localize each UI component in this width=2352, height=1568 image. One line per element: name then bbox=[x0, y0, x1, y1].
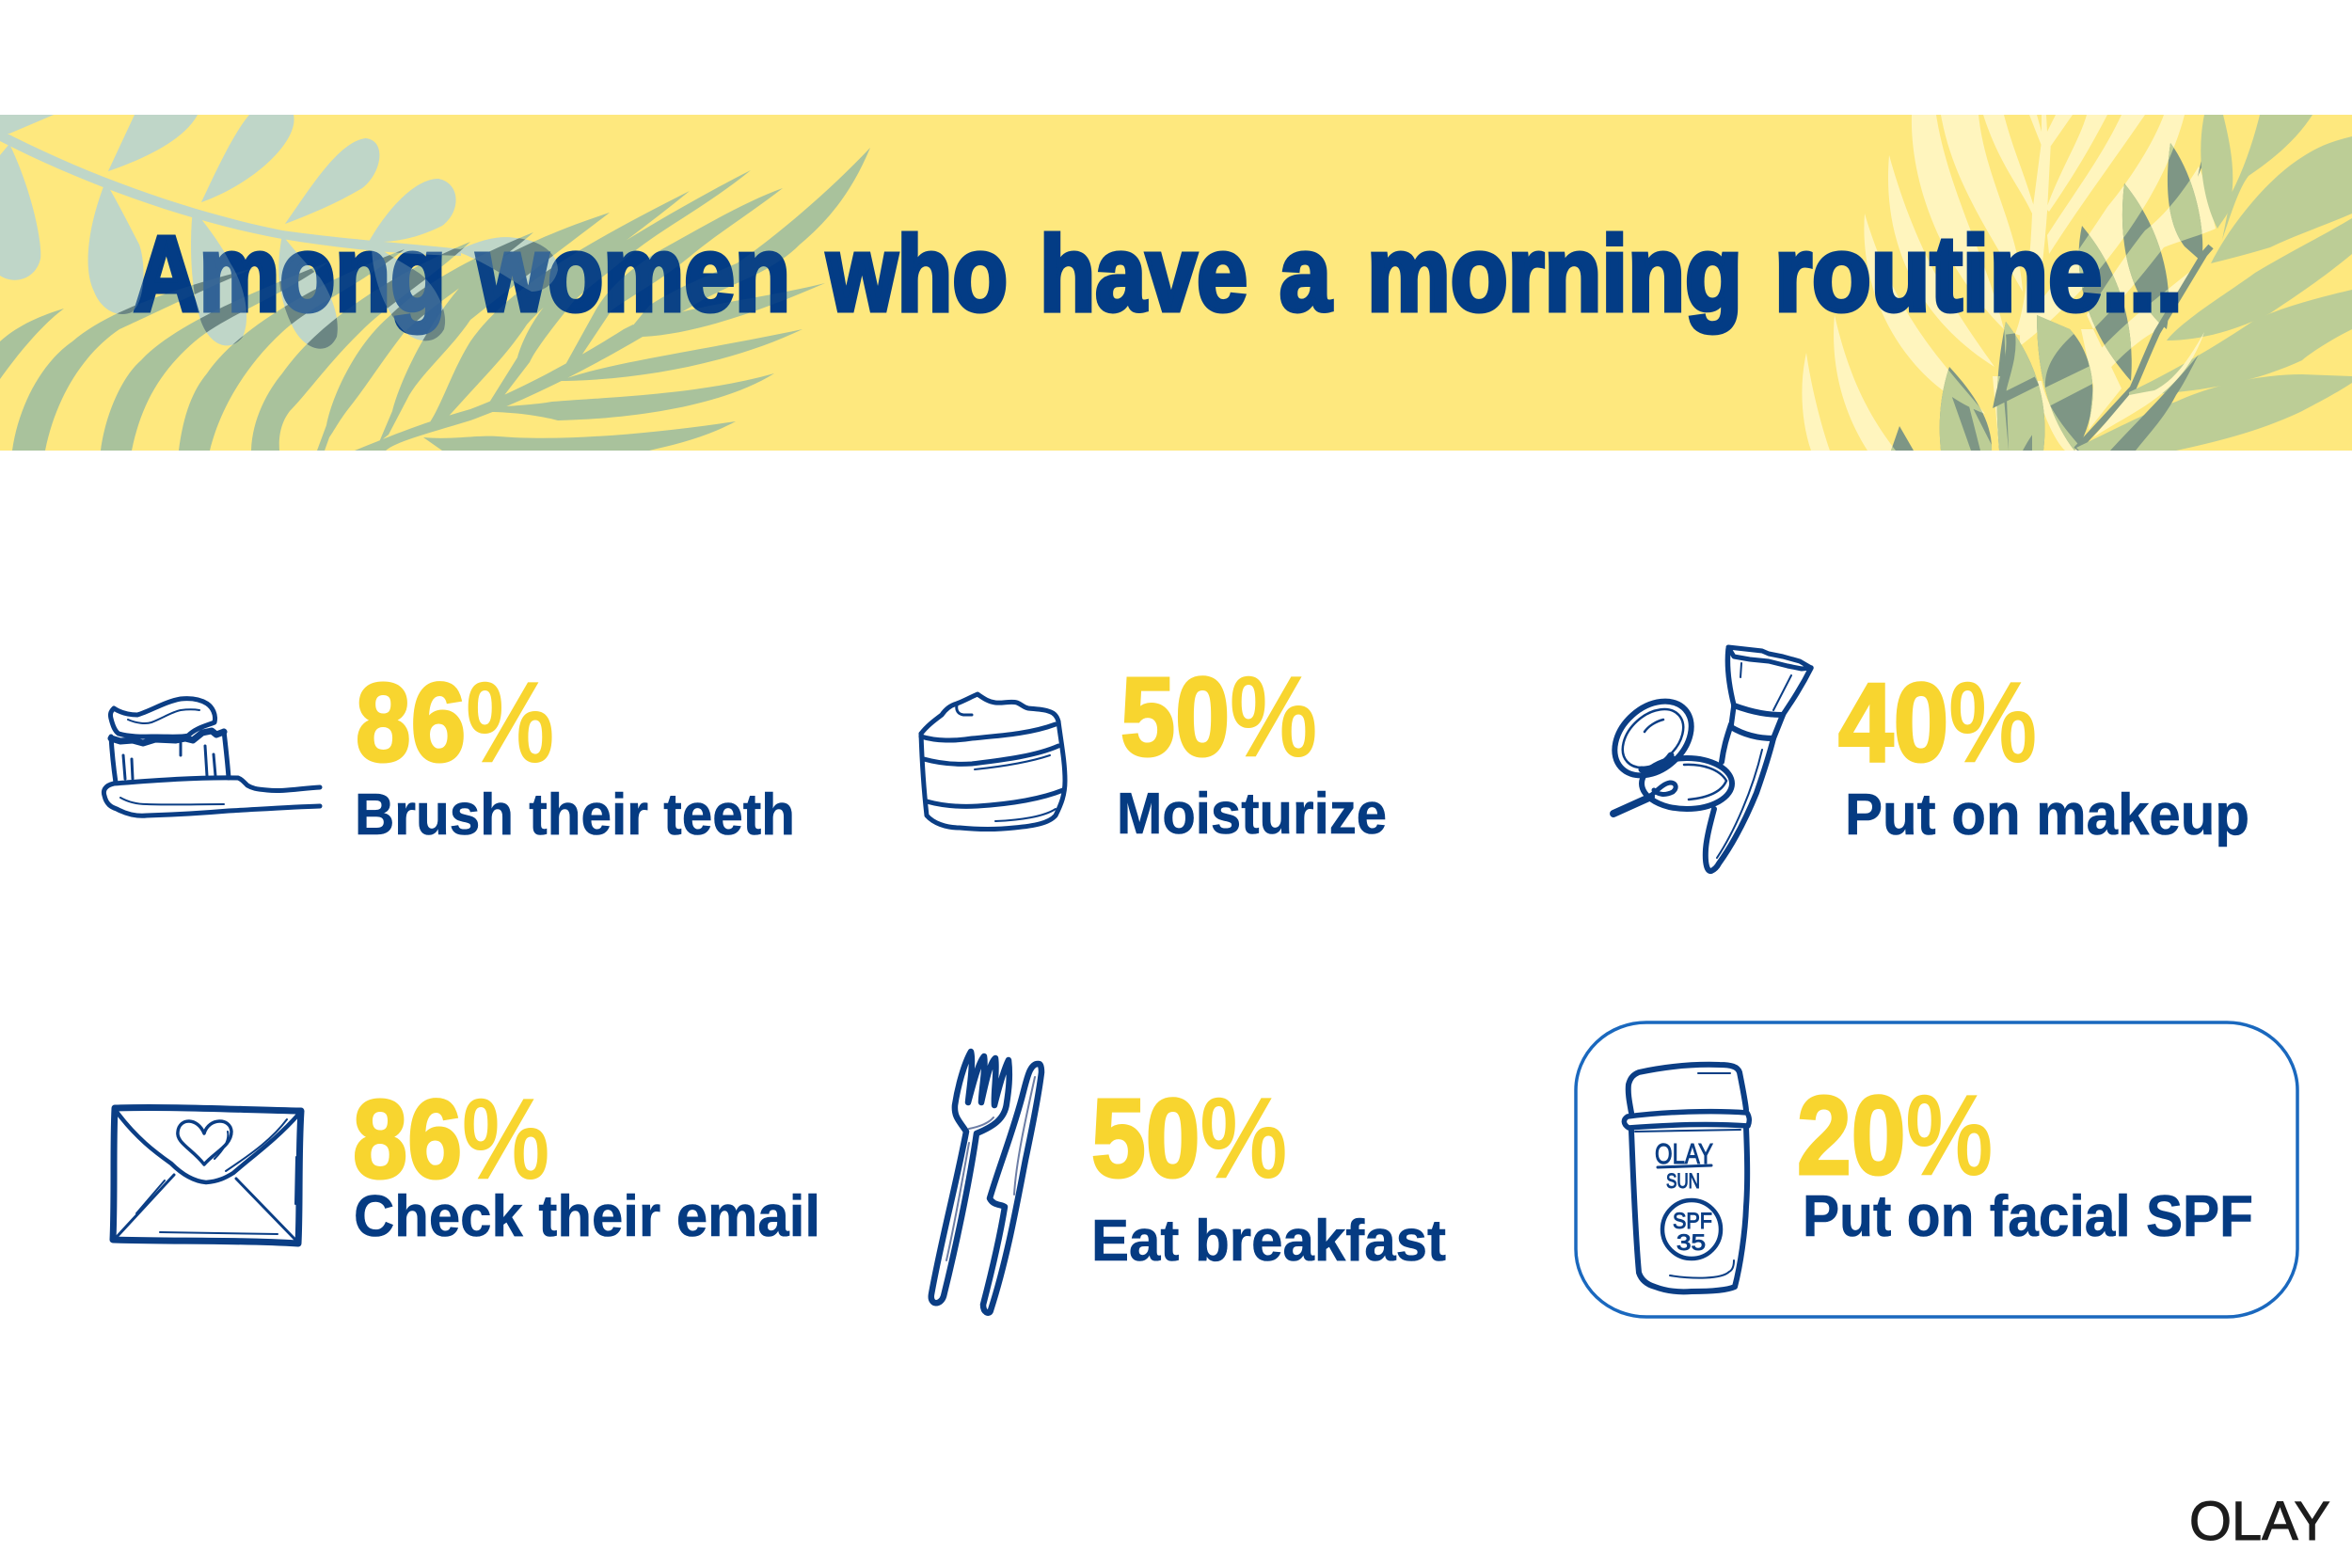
title: routine... bbox=[1774, 214, 2183, 333]
bottle label text bbox=[1655, 1137, 1713, 1256]
title: women bbox=[476, 214, 790, 333]
percentage: 50% bbox=[1120, 655, 1317, 780]
bottle label text: 35 bbox=[1677, 1230, 1706, 1256]
percentage: 86% bbox=[353, 1077, 549, 1202]
percentage: 20% bbox=[1797, 1073, 1993, 1198]
cream strip over big leaves bbox=[2093, 332, 2204, 437]
icon: toothbrush bbox=[103, 699, 320, 816]
banner bbox=[0, 115, 2352, 451]
label: Check their email bbox=[354, 1184, 820, 1249]
cream palm right bbox=[1802, 115, 2216, 451]
label: Moisturize bbox=[1117, 782, 1387, 847]
stat: moisturize bbox=[921, 655, 1387, 847]
title: have bbox=[1040, 214, 1248, 333]
stat: makeup bbox=[1600, 647, 2249, 871]
icon: fork and knife bbox=[931, 1052, 1041, 1313]
palm leaf left bbox=[0, 148, 870, 451]
stat: breakfast bbox=[931, 1052, 1446, 1313]
dark band across big leaves bbox=[2110, 355, 2199, 451]
narrow leaves right bbox=[1891, 143, 2211, 451]
stat: email bbox=[113, 1077, 820, 1249]
title bbox=[133, 231, 2179, 335]
icon: makeup brush and compact bbox=[1600, 647, 1811, 871]
percentage: 50% bbox=[1091, 1076, 1287, 1201]
icon: envelope with heart bbox=[113, 1107, 301, 1243]
bottle label text: SUN bbox=[1666, 1169, 1700, 1193]
title: Among bbox=[134, 214, 446, 333]
highlighted stat: facial SPF bbox=[1576, 1022, 2297, 1317]
bottle label text: OLAY bbox=[1655, 1137, 1713, 1170]
label: Put on makeup bbox=[1845, 783, 2249, 847]
title: a bbox=[1279, 214, 1332, 333]
title: morning bbox=[1367, 214, 1742, 333]
pale leaf and palm veil over title bbox=[117, 239, 558, 349]
pale leaf branch left bbox=[0, 115, 558, 349]
label: Put on facial SPF bbox=[1803, 1184, 2253, 1249]
label: Brush their teeth bbox=[355, 783, 795, 847]
percentage: 86% bbox=[356, 660, 554, 785]
icon: cream jar bbox=[921, 694, 1065, 830]
bottle label text: SPF bbox=[1673, 1209, 1712, 1234]
stat: brush teeth bbox=[103, 660, 795, 847]
logo: OLAY: OLAY bbox=[2189, 1491, 2330, 1552]
icon: sunscreen bottle bbox=[1624, 1065, 1749, 1291]
percentage: 40% bbox=[1838, 660, 2037, 785]
highlight box bbox=[1576, 1022, 2297, 1317]
big leaves right bbox=[2076, 115, 2352, 451]
overlap shadow of leaves bbox=[117, 238, 553, 349]
label: Eat breakfast bbox=[1091, 1209, 1446, 1274]
title: who bbox=[826, 214, 1008, 333]
